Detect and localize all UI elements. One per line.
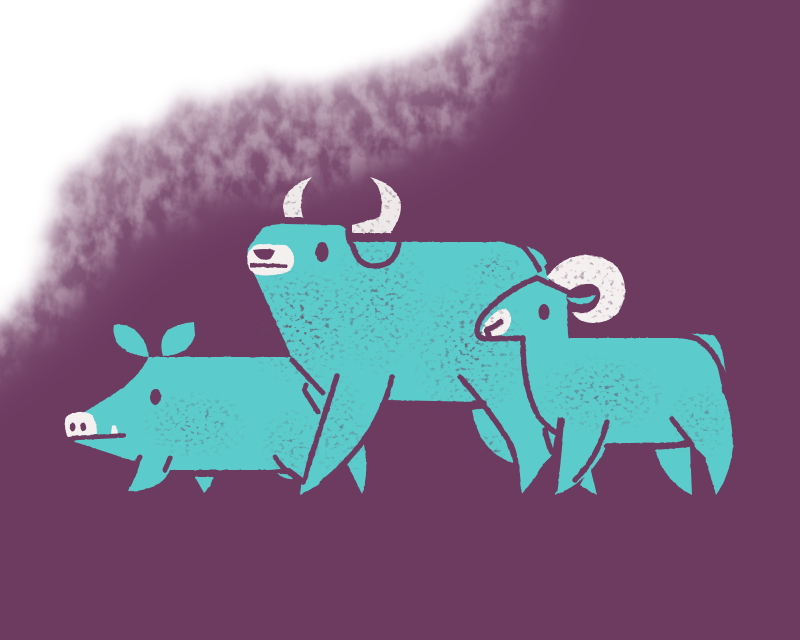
background: white smoke cloud [0,0,575,430]
ram horn [547,255,625,323]
bull muzzle [247,244,294,276]
ram [477,255,733,495]
pig and bull and ram artwork [65,177,733,495]
pig body [65,357,323,491]
bull neck line [348,230,399,266]
bull eye [316,242,328,262]
ram muzzle [482,308,511,338]
ram ear [566,295,596,304]
pig ears [113,322,195,357]
bull far legs [347,408,513,494]
bull nostril [253,249,275,260]
bull ear divider [522,245,540,272]
pig [65,322,323,493]
ram body [478,279,733,495]
bull horns [283,177,401,233]
pig snout [65,412,97,437]
bull ear behind ram [522,245,547,272]
ram horn hole [566,284,600,311]
pig eye [150,389,161,405]
ram tail [680,333,725,378]
pig far hind foot [277,473,293,479]
texture: grey specks on horns [284,182,624,323]
bull mouth [250,265,287,266]
bull body [247,224,570,495]
bull rear near leg in front of ram chest [516,447,548,493]
pig mouth [73,436,124,438]
ram outlines [477,278,723,490]
ram eye [538,304,550,320]
texture: dark specks on the animals [146,226,728,479]
pig far leg [195,477,213,493]
pig leg lines [135,360,323,479]
pig tusk [111,425,118,434]
bull leg lines [303,376,518,490]
ram far legs [580,447,692,495]
pig nostrils [70,422,86,432]
bull [247,177,570,495]
illustration: pig, bull and ram [0,0,734,495]
